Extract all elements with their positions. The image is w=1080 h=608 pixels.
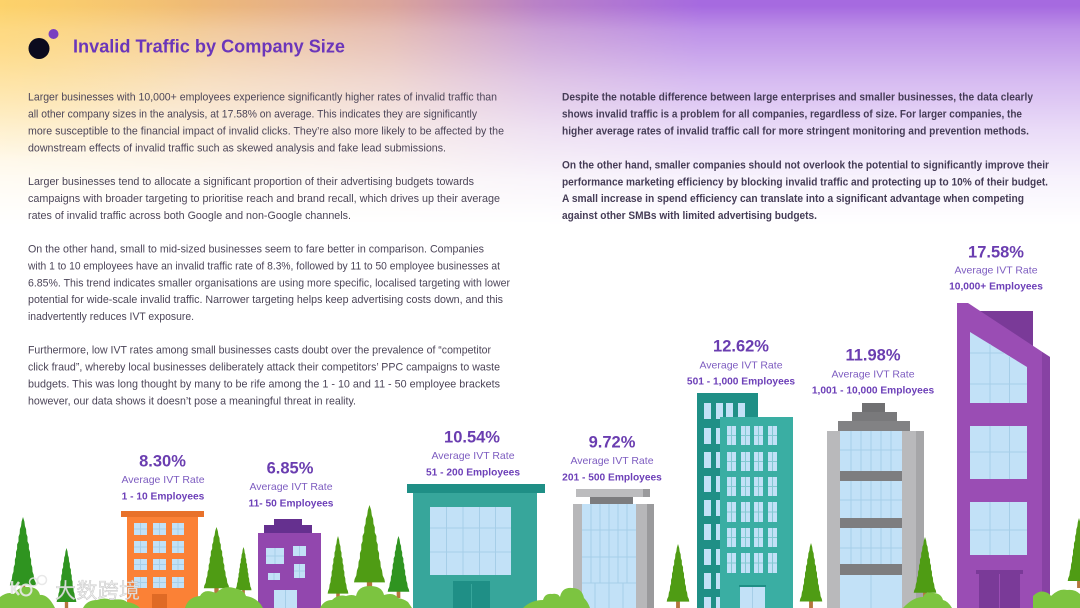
trees xyxy=(10,505,1080,608)
text block: right column xyxy=(562,92,1049,222)
label: 10,000+ employees: 17.58% xyxy=(968,244,1024,262)
building: 11 - 50 employees (purple) xyxy=(258,519,321,608)
paragraph 6 xyxy=(562,160,1049,222)
background yellow glow xyxy=(0,0,320,180)
label: 51 - 200 employees: Average IVT Rate xyxy=(431,450,515,462)
title: Invalid Traffic by Company Size xyxy=(73,36,345,56)
label: 1 - 10 employees: Average IVT Rate xyxy=(121,474,205,486)
paragraph 6: against other SMBs with limited advertising budgets. xyxy=(562,210,817,222)
paragraph 4: however, our data shows it doesn’t pose a meaningful threat in reality. xyxy=(28,396,356,408)
label: 11 - 50 employees: 11- 50 Employees xyxy=(249,498,334,510)
label: 1 - 10 employees xyxy=(121,452,205,502)
building: 1 - 10 employees (orange) xyxy=(121,511,204,608)
label: 1,001 - 10,000 employees: 11.98% xyxy=(845,346,901,364)
building: 10,000+ employees (purple tower) xyxy=(957,303,1050,608)
paragraph 6: A small increase in spend efficiency can translate into a significant advantage when competing xyxy=(562,193,1024,205)
building: 1,001 - 10,000 employees (gray tower) xyxy=(827,403,924,608)
label: 11 - 50 employees xyxy=(249,460,334,510)
watermark xyxy=(12,576,140,603)
label: 1,001 - 10,000 employees: 1,001 - 10,000 Employees xyxy=(812,386,934,396)
paragraph 3 xyxy=(27,244,510,323)
paragraph 1: downstream effects of invalid traffic such as skewed analysis and fake lead submissions. xyxy=(28,142,446,154)
label: 10,000+ employees: 10,000+ Employees xyxy=(949,282,1043,292)
paragraph 3: 6.85%. This trend indicates smaller organisations are using more specific, localised targeting with lower xyxy=(28,278,510,290)
paragraph 5: higher average rates of invalid traffic call for more stringent monitoring and prevention methods. xyxy=(562,126,1029,138)
paragraph 2: rates of invalid traffic across both Google and non-Google channels. xyxy=(28,210,351,222)
paragraph 3: On the other hand, small to mid-sized businesses seem to fare better in comparison. Companies xyxy=(28,244,484,256)
watermark: 大数跨境 xyxy=(55,580,140,603)
paragraph 2: Larger businesses tend to allocate a significant proportion of their advertising budgets towards xyxy=(28,176,474,188)
label: 501 - 1,000 employees: Average IVT Rate xyxy=(699,360,783,372)
building: 51 - 200 employees (teal) xyxy=(407,484,545,608)
label: 201 - 500 employees: 9.72% xyxy=(589,434,636,452)
label: 501 - 1,000 employees: 501 - 1,000 Employees xyxy=(687,376,795,388)
label: 51 - 200 employees: 51 - 200 Employees xyxy=(426,468,520,478)
background gradient xyxy=(0,0,1080,192)
logo icon: two dots xyxy=(28,29,58,59)
building: 501 - 1,000 employees (teal tower) xyxy=(697,393,793,608)
paragraph 1: more susceptible to the financial impact of invalid clicks. They’re also more likely to be affected by the xyxy=(28,126,504,138)
building: 201 - 500 employees (gray) xyxy=(573,489,654,608)
paragraph 3: potential for wide-scale invalid traffic. Narrower targeting helps keep advertising costs down, and this xyxy=(28,294,503,306)
label: 10,000+ employees: Average IVT Rate xyxy=(954,264,1038,276)
label: 201 - 500 employees xyxy=(562,434,662,484)
paragraph 3: with 1 to 10 employees have an invalid traffic rate of 8.3%, followed by 11 to 50 employee businesses at xyxy=(27,260,500,272)
label: 10,000+ employees xyxy=(949,244,1043,292)
label: 11 - 50 employees: 6.85% xyxy=(267,460,314,478)
label: 11 - 50 employees: Average IVT Rate xyxy=(249,481,333,493)
bushes xyxy=(0,586,1080,608)
label: 1,001 - 10,000 employees: Average IVT Rate xyxy=(831,368,915,380)
paragraph 5 xyxy=(562,92,1033,138)
paragraph 1: all other company sizes in the analysis, at 17.58% on average. This indicates they are significantly xyxy=(28,108,478,120)
label: 501 - 1,000 employees xyxy=(687,338,795,388)
label: 1 - 10 employees: 1 - 10 Employees xyxy=(122,492,205,502)
paragraph 4 xyxy=(28,344,500,408)
paragraph 5: Despite the notable difference between large enterprises and smaller businesses, the data clearly xyxy=(562,92,1033,104)
label: 51 - 200 employees xyxy=(426,428,520,478)
paragraph 4: Furthermore, low IVT rates among small businesses casts doubt over the prevalence of “competitor xyxy=(28,344,491,356)
paragraph 6: performance marketing efficiency by blocking invalid traffic and protecting up to 10% of their budget. xyxy=(562,176,1048,188)
text block: left column xyxy=(27,92,510,408)
label: 51 - 200 employees: 10.54% xyxy=(444,428,500,446)
paragraph 2 xyxy=(28,176,500,222)
paragraph 1: Larger businesses with 10,000+ employees experience significantly higher rates of invalid traffic than xyxy=(28,92,497,104)
label: 201 - 500 employees: Average IVT Rate xyxy=(570,455,654,467)
paragraph 6: On the other hand, smaller companies should not overlook the potential to significantly improve their xyxy=(562,160,1049,172)
paragraph 5: shows invalid traffic is a problem for all companies, regardless of size. For larger companies, the xyxy=(562,108,1022,120)
label: 1,001 - 10,000 employees xyxy=(812,346,934,396)
paragraph 4: click fraud”, whereby local businesses deliberately attack their competitors’ PPC campaigns to waste xyxy=(28,362,500,374)
label: 1 - 10 employees: 8.30% xyxy=(139,452,186,470)
paragraph 2: campaigns with broader targeting to prioritise reach and brand recall, which drives up their average xyxy=(28,193,500,205)
paragraph 3: inadvertently reduces IVT exposure. xyxy=(28,311,194,323)
label: 501 - 1,000 employees: 12.62% xyxy=(713,338,769,356)
paragraph 1 xyxy=(28,92,504,154)
tree in front of gray tower xyxy=(914,537,936,599)
paragraph 4: budgets. This was long thought by many to be rife among the 1 - 10 and 11 - 50 employee brackets xyxy=(28,378,500,390)
label: 201 - 500 employees: 201 - 500 Employees xyxy=(562,472,662,484)
